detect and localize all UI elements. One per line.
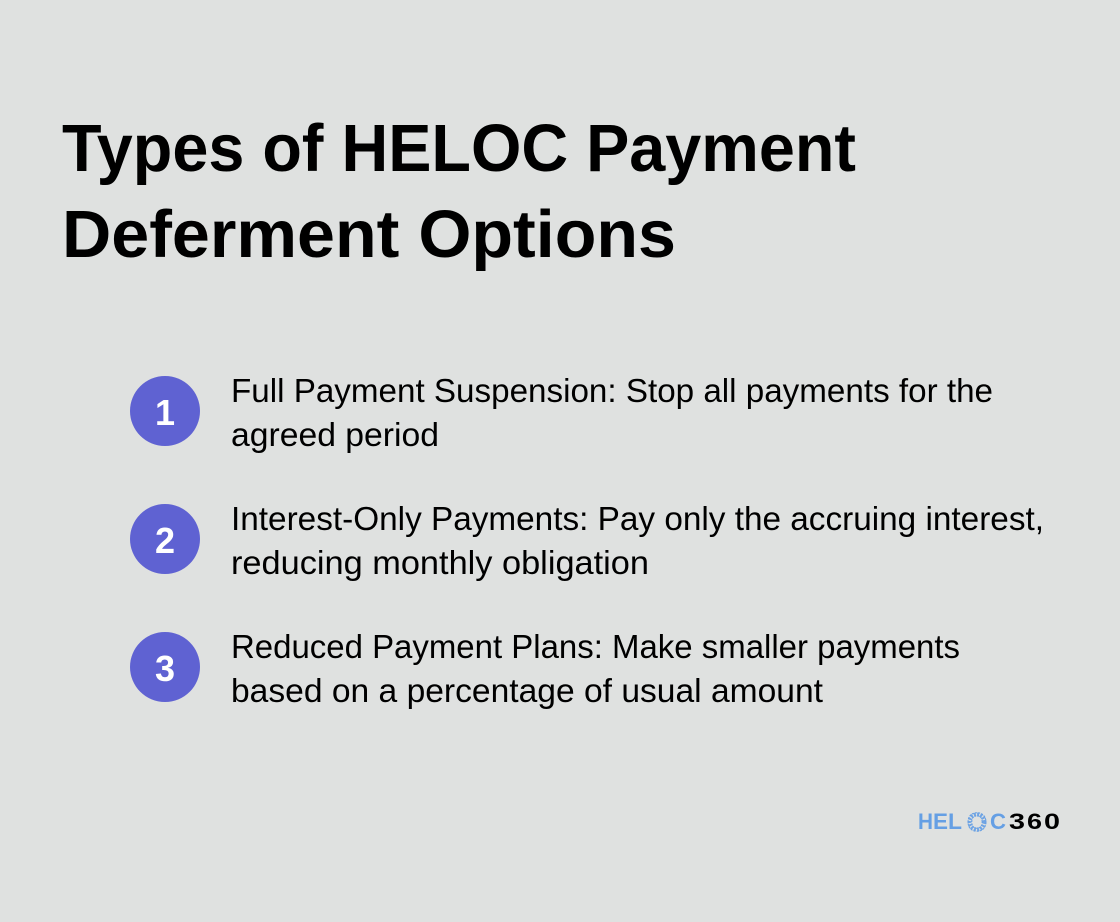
- logo: HELOC360: 6: [1027, 809, 1042, 834]
- item 1 text: Full Payment Suspension: Stop all payments for the: [231, 372, 993, 409]
- title: Deferment Options: [62, 197, 676, 272]
- item 2 text: reducing monthly obligation: [231, 544, 649, 581]
- logo: HELOC360: 0: [1044, 809, 1060, 834]
- title: [62, 111, 856, 272]
- number badge 2: 2: [155, 520, 175, 561]
- title: Types of HELOC Payment: [62, 111, 856, 186]
- number badge 1: [130, 376, 200, 446]
- number badge 1: 1: [155, 392, 175, 433]
- logo: HELOC360: E: [933, 809, 948, 834]
- list item 3: [130, 628, 960, 709]
- logo: HELOC360: L: [948, 809, 962, 834]
- logo: HELOC360: C: [990, 809, 1006, 834]
- item 1 text: [231, 372, 993, 453]
- number badge 3: 3: [155, 648, 175, 689]
- number badge 3: [130, 632, 200, 702]
- logo: HELOC360: O: [967, 807, 987, 837]
- number badge 2: [130, 504, 200, 574]
- logo: HELOC360: [918, 807, 1060, 837]
- list item 2: [130, 500, 1044, 581]
- logo: HELOC360: H: [918, 809, 933, 834]
- logo: HELOC360: 3: [1009, 809, 1025, 834]
- item 2 text: Interest-Only Payments: Pay only the accruing interest,: [231, 500, 1044, 537]
- item 3 text: [231, 628, 960, 709]
- list item 1: [130, 372, 993, 453]
- item 3 text: based on a percentage of usual amount: [231, 672, 823, 709]
- item 1 text: agreed period: [231, 416, 439, 453]
- item 2 text: [231, 500, 1044, 581]
- item 3 text: Reduced Payment Plans: Make smaller payments: [231, 628, 960, 665]
